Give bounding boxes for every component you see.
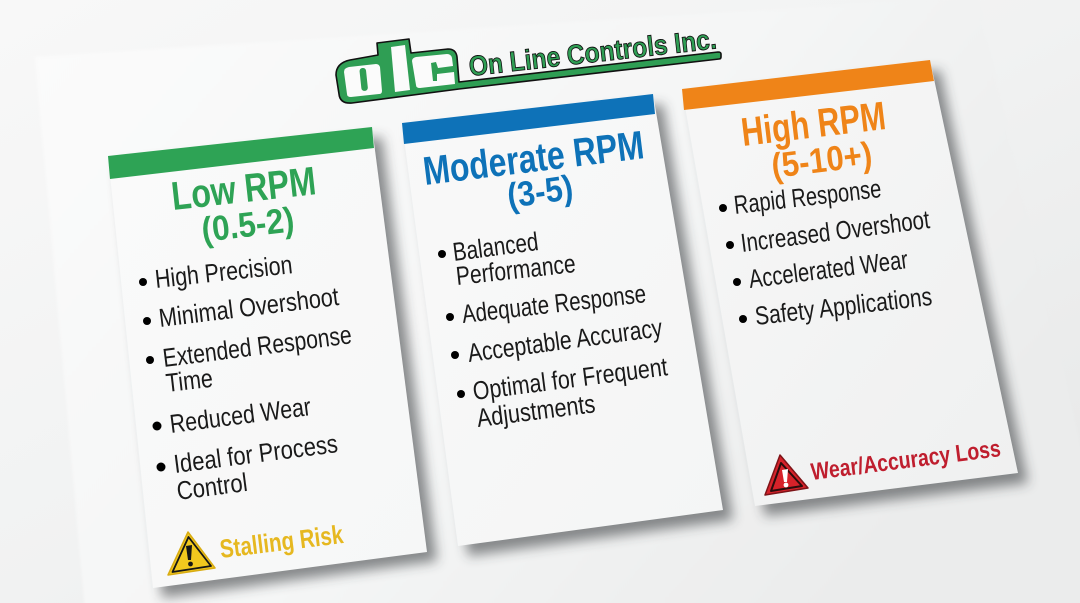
icon: red warning — [765, 455, 808, 495]
bullet list: Optimal for Frequent — [471, 351, 670, 406]
logo wordmark: On Line Controls Inc. — [467, 23, 718, 82]
bullet list: Control — [175, 467, 249, 506]
warning label: Wear/Accuracy Loss — [809, 435, 1002, 486]
range: (3-5) — [505, 168, 575, 216]
card body — [108, 127, 427, 588]
header bar — [108, 127, 374, 179]
bullet list: Rapid Response — [732, 173, 883, 220]
heading: Low RPM — [169, 159, 318, 219]
bullet list: Reduced Wear — [168, 391, 313, 439]
bullet list — [719, 173, 934, 331]
card shadow — [692, 70, 1028, 516]
warning label: Stalling Risk — [218, 519, 345, 564]
range: (5-10+) — [769, 135, 874, 186]
card shadow — [118, 137, 437, 598]
bullet list: Adjustments — [475, 388, 597, 433]
panel: Low RPM — [108, 127, 437, 598]
bullet list: Performance — [454, 248, 577, 291]
bullet list — [139, 249, 353, 506]
bullet list: High Precision — [153, 249, 294, 294]
bullet list: Accelerated Wear — [747, 244, 910, 294]
logo: On Line Controls Inc. — [336, 23, 721, 103]
header bar — [402, 94, 655, 144]
bullet list: Adequate Response — [460, 278, 647, 329]
bullet list: Time — [164, 363, 214, 398]
logo mark: olc — [336, 39, 721, 103]
bullet list: Ideal for Process — [172, 428, 339, 479]
panel: High RPM — [682, 60, 1028, 516]
heading: Moderate RPM — [421, 123, 646, 194]
bullet list: Minimal Overshoot — [157, 281, 341, 333]
bullet list: Extended Response — [161, 319, 353, 373]
bullet list: Acceptable Accuracy — [466, 312, 664, 368]
bullet list: Increased Overshoot — [739, 204, 932, 258]
heading: High RPM — [739, 94, 888, 155]
bullet list: Safety Applications — [753, 281, 934, 331]
card body — [682, 60, 1018, 506]
range: (0.5-2) — [199, 200, 296, 250]
bullet list — [438, 226, 670, 433]
card shadow — [412, 104, 733, 556]
header bar — [682, 60, 934, 110]
card body — [402, 94, 723, 546]
panel: Moderate RPM — [402, 94, 733, 556]
bullet list: Balanced — [451, 226, 540, 267]
icon: yellow warning — [168, 532, 215, 575]
